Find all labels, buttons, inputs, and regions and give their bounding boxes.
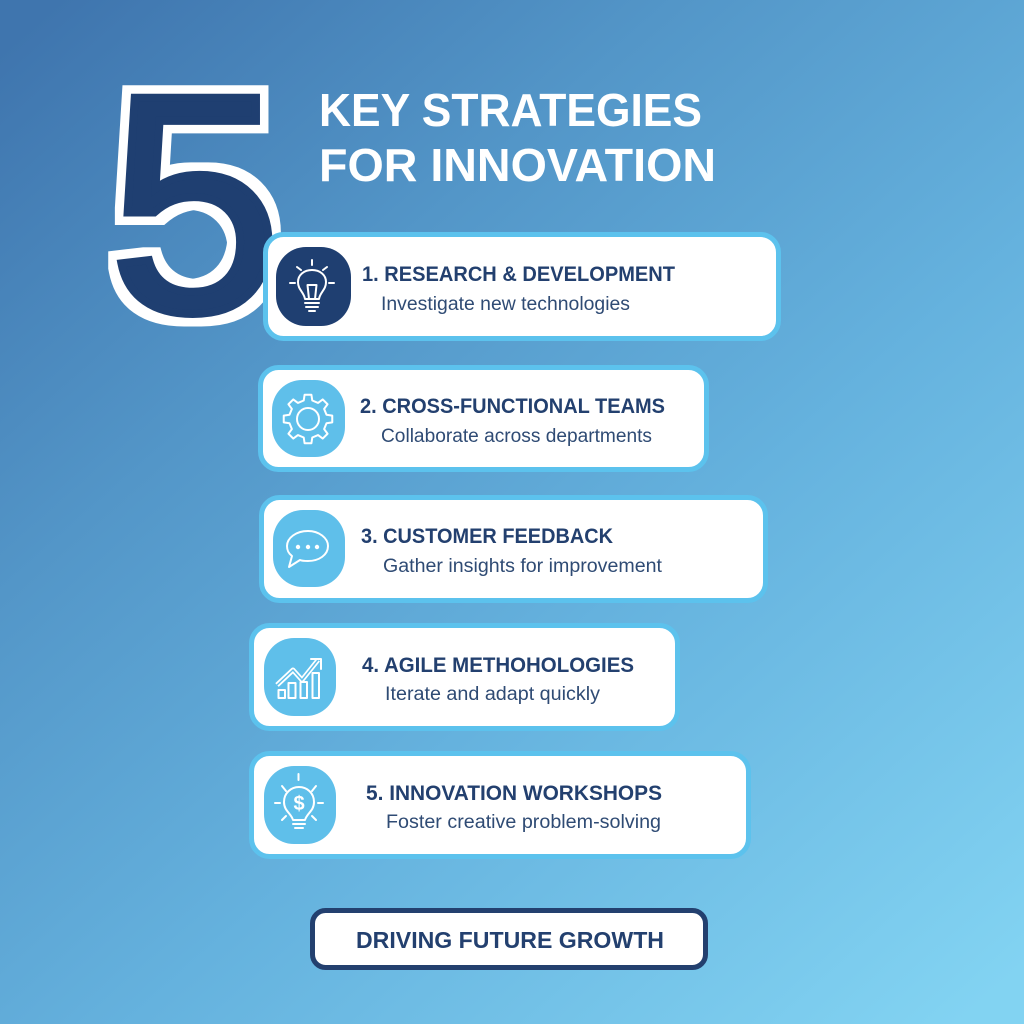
card 3: customer feedback [262,498,766,600]
title [319,84,716,191]
card 3: customer feedback: 3. CUSTOMER FEEDBACK [361,525,613,548]
icon: growth chart [264,638,336,716]
card 1: research and development [266,234,778,338]
title: FOR INNOVATION [319,139,716,191]
card 4: agile methodologies [252,626,678,728]
card 2: cross-functional teams [260,368,706,470]
card 4: agile methodologies: Iterate and adapt quickly [385,684,601,705]
card 5: innovation workshops: Foster creative problem-solving [386,812,661,833]
card 1: research and development: 1. RESEARCH & DEVELOPMENT [362,263,675,286]
card 1: research and development: Investigate new technologies [381,294,630,315]
card 2: cross-functional teams: 2. CROSS-FUNCTIONAL TEAMS [360,395,665,418]
card 5: innovation workshops [252,754,748,856]
card 2: cross-functional teams: Collaborate across departments [381,426,652,447]
card 5: innovation workshops: 5. INNOVATION WORKSHOPS [366,782,662,805]
footer button [312,910,706,968]
icon: light bulb [276,247,351,326]
icon: idea bulb with dollar: $ [293,793,305,815]
icon: gear [272,380,345,457]
footer button: DRIVING FUTURE GROWTH [356,927,664,953]
icon: idea bulb with dollar [264,766,336,844]
big numeral 5: 5 [109,30,281,377]
card 4: agile methodologies: 4. AGILE METHOHOLOGIES [362,654,634,677]
icon: speech bubble [273,510,345,587]
card 3: customer feedback: Gather insights for improvement [383,556,663,577]
title: KEY STRATEGIES [319,84,702,136]
